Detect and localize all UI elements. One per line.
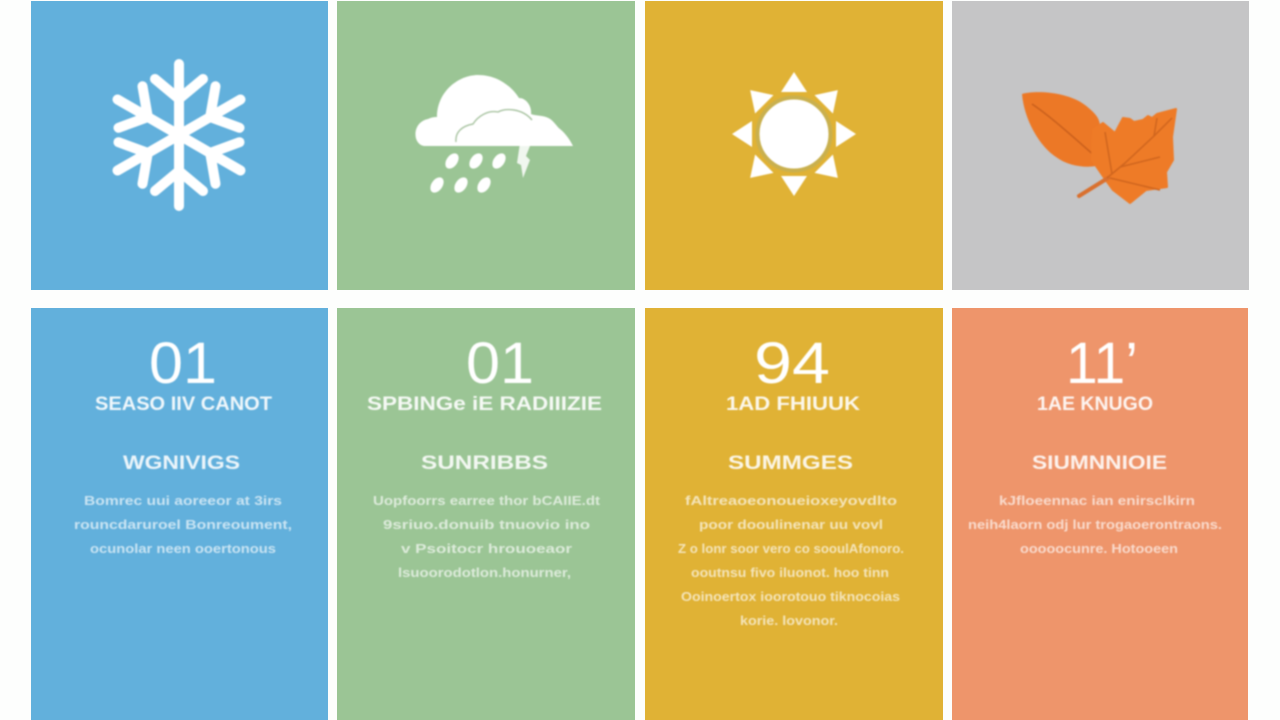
icon: rain cloud with lightning	[415, 75, 573, 195]
spring body text: v Psoitocr hrouoeaor	[401, 541, 572, 556]
summer body text: korie. lovonor.	[740, 613, 838, 628]
spring heading: SUNRIBBS	[421, 453, 548, 474]
autumn number: 11’	[1066, 331, 1138, 396]
summer body text: poor dooulinenar uu vovl	[699, 517, 883, 532]
spring body text: Uopfoorrs earree thor bCAIIE.dt	[373, 493, 601, 508]
autumn body text: kJfloeennac ian enirsclkirn	[999, 493, 1195, 508]
winter heading: WGNIVIGS	[123, 453, 240, 474]
winter number: 01	[149, 331, 217, 396]
icon: autumn leaves	[1022, 92, 1176, 203]
summer body text	[678, 493, 904, 628]
autumn subtitle: 1AE KNUGO	[1037, 394, 1153, 415]
winter subtitle: SEASO IIV CANOT	[95, 394, 272, 415]
panel: spring details	[337, 308, 635, 720]
autumn body text: ooooocunre. Hotooeen	[1020, 541, 1178, 556]
winter body text: Bomrec uui aoreeor at 3irs	[84, 493, 282, 508]
icon: sun	[732, 72, 856, 196]
summer body text: Ooinoertox ioorotouo tiknocoias	[681, 589, 900, 604]
autumn heading: SIUMNNIOIE	[1032, 453, 1167, 474]
summer number: 94	[754, 331, 830, 396]
panel: autumn details	[952, 308, 1248, 720]
autumn body text	[968, 493, 1222, 556]
winter body text: ocunolar neen ooertonous	[90, 541, 276, 556]
spring body text	[373, 493, 601, 580]
winter body text	[74, 493, 292, 556]
panel: winter details	[31, 308, 328, 720]
summer body text: Z o lonr soor vero co sooulAfonoro.	[678, 541, 904, 556]
panel: winter icon tile	[31, 1, 328, 290]
spring subtitle: SPBINGe iE RADIIIZIE	[367, 394, 602, 415]
winter body text: rouncdaruroel Bonreoument,	[74, 517, 292, 532]
autumn body text: neih4laorn odj lur trogaoerontraons.	[968, 517, 1222, 532]
summer body text: fAltreaoeonoueioxeyovdlto	[685, 493, 897, 508]
icon: snowflake	[106, 64, 252, 206]
panel: summer details	[645, 308, 943, 720]
summer body text: ooutnsu fivo iluonot. hoo tinn	[691, 565, 889, 580]
summer heading: SUMMGES	[728, 453, 853, 474]
spring body text: 9sriuo.donuib tnuovio ino	[383, 517, 590, 532]
summer subtitle: 1AD FHIUUK	[726, 394, 860, 415]
spring body text: lsuoorodotlon.honurner,	[398, 565, 571, 580]
spring number: 01	[466, 331, 534, 396]
panel: spring icon tile	[337, 1, 635, 290]
panel: autumn icon tile	[952, 1, 1249, 290]
panel: summer icon tile	[645, 1, 943, 290]
